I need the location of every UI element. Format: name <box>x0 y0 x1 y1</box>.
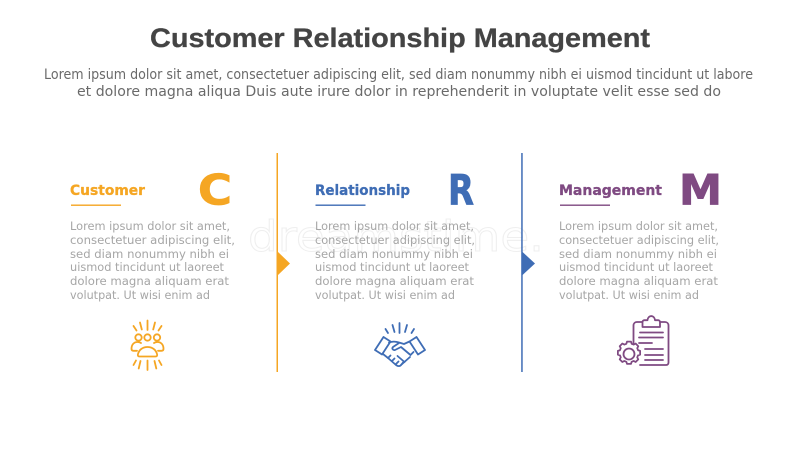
body text: customer: consectetuer adipiscing elit, <box>70 233 235 247</box>
body text: customer: uismod tincidunt ut laoreet <box>70 260 224 274</box>
body text: relationship: uismod tincidunt ut laoreet <box>315 260 469 274</box>
panel: customer <box>70 166 235 370</box>
letter C: C <box>198 166 232 214</box>
heading underline: relationship <box>316 204 366 206</box>
body text: relationship: consectetuer adipiscing elit, <box>315 233 475 247</box>
body text: customer: volutpat. Ut wisi enim ad <box>70 288 210 302</box>
icon: handshake <box>375 323 425 366</box>
divider arrow: orange <box>276 153 290 372</box>
body text: relationship <box>315 219 475 302</box>
heading underline: customer <box>71 204 121 206</box>
letter R: R <box>448 166 474 214</box>
subtitle: et dolore magna aliqua Duis aute irure dolor in reprehenderit in voluptate velit esse sed do <box>77 84 721 100</box>
divider arrow: blue <box>521 153 535 372</box>
icon: clipboard and gear <box>618 316 668 365</box>
body text: management <box>559 219 719 302</box>
heading: management: Management <box>559 183 662 199</box>
icon: people group <box>132 320 164 370</box>
body text: management: uismod tincidunt ut laoreet <box>559 260 713 274</box>
body text: management: volutpat. Ut wisi enim ad <box>559 288 699 302</box>
body text: management: Lorem ipsum dolor sit amet, <box>559 219 718 233</box>
body text: management: sed diam nonummy nibh ei <box>559 247 717 261</box>
body text: management: consectetuer adipiscing elit, <box>559 233 719 247</box>
letter M: M <box>679 166 722 214</box>
heading: relationship: Relationship <box>315 183 410 199</box>
body text: relationship: volutpat. Ut wisi enim ad <box>315 288 455 302</box>
title: Customer Relationship Management <box>150 23 650 53</box>
body text: customer: dolore magna aliquam erat <box>70 274 229 288</box>
watermark: dreamstime. <box>248 212 544 261</box>
body text: management: dolore magna aliquam erat <box>559 274 718 288</box>
heading underline: management <box>560 204 610 206</box>
heading: customer: Customer <box>70 183 146 199</box>
panel: management <box>559 166 722 365</box>
body text: relationship: Lorem ipsum dolor sit amet, <box>315 219 474 233</box>
body text: relationship: dolore magna aliquam erat <box>315 274 474 288</box>
body text: relationship: sed diam nonummy nibh ei <box>315 247 473 261</box>
body text: customer <box>70 219 235 302</box>
subtitle <box>44 67 753 100</box>
body text: customer: Lorem ipsum dolor sit amet, <box>70 219 230 233</box>
panel: relationship <box>315 166 475 366</box>
body text: customer: sed diam nonummy nibh ei <box>70 247 229 261</box>
